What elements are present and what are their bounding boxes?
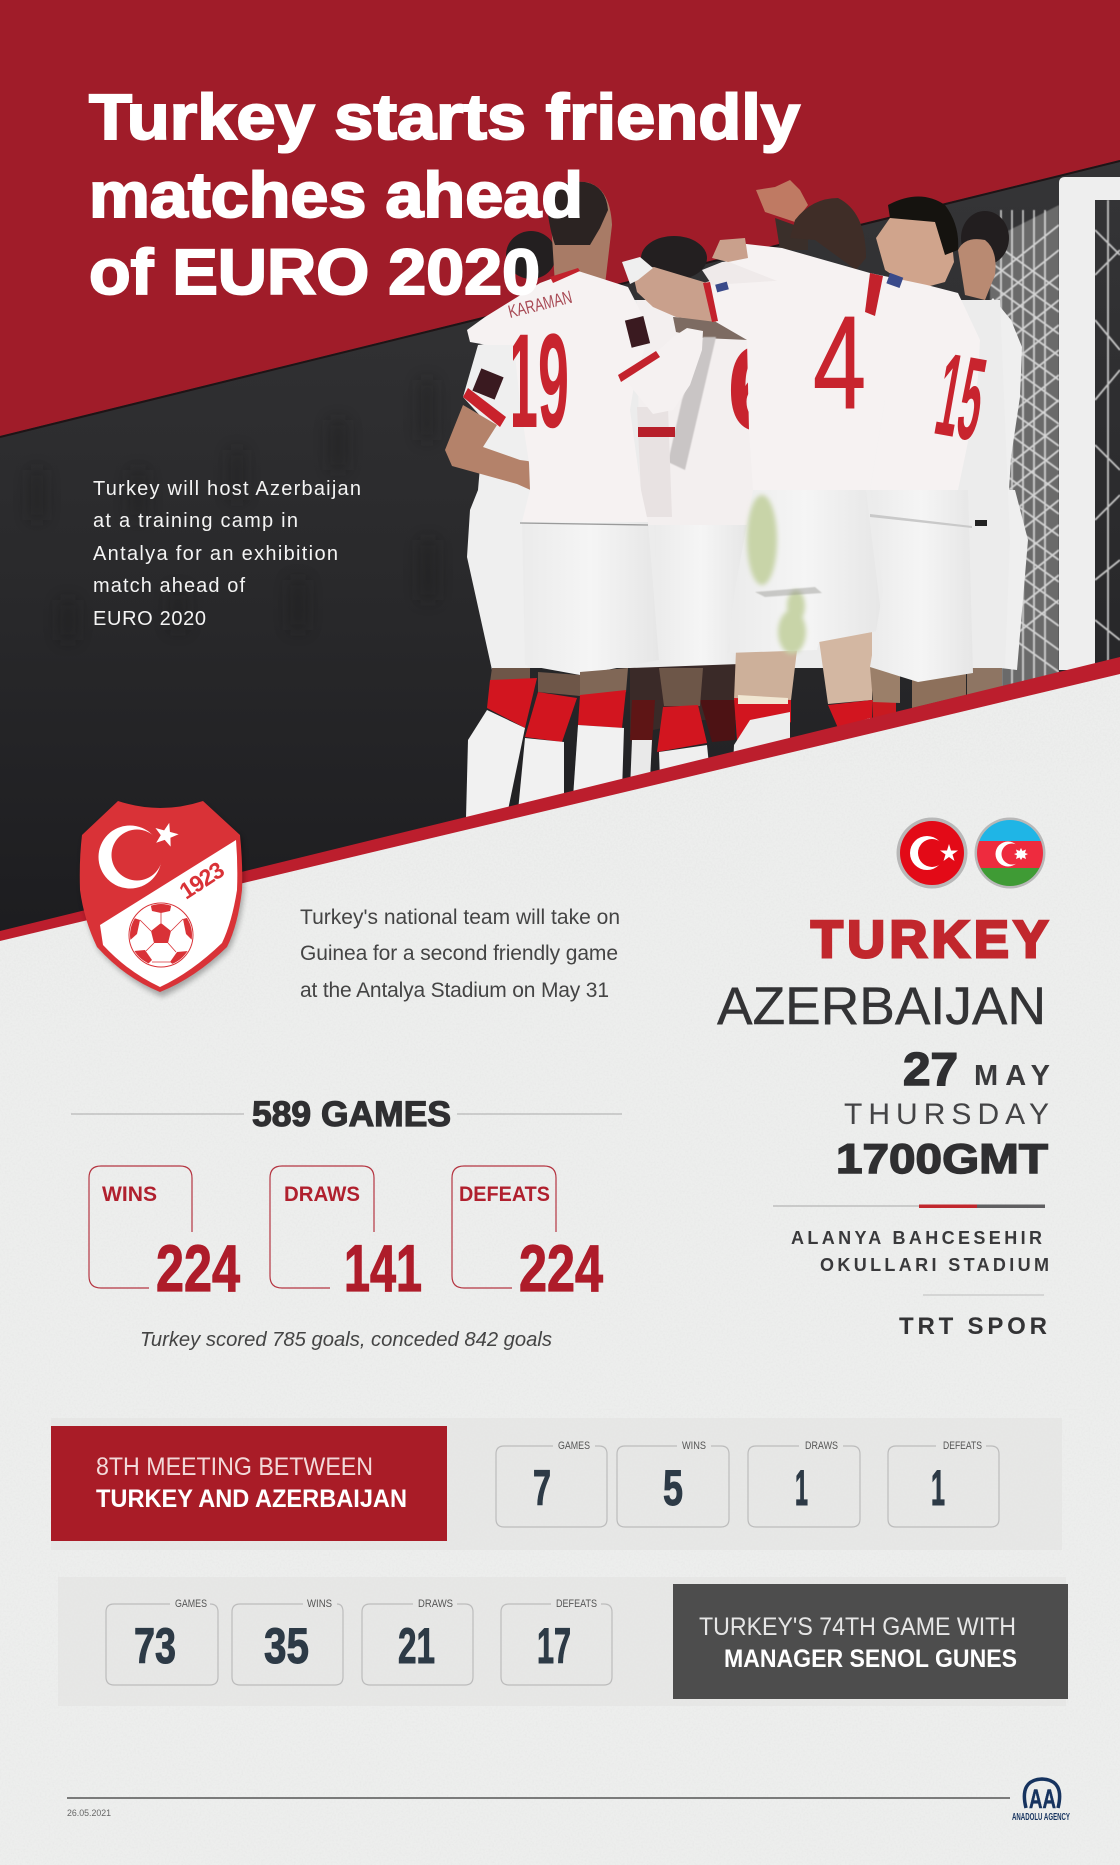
goal net bbox=[990, 205, 1059, 690]
footer rule and date: 26.05.2021 bbox=[67, 1808, 111, 1818]
title: matches ahead bbox=[89, 159, 583, 231]
match teams: AZERBAIJAN bbox=[717, 977, 1046, 1036]
card: defeats bbox=[501, 1598, 612, 1685]
venue: OKULLARI STADIUM bbox=[820, 1255, 1049, 1275]
title: of EURO 2020 bbox=[89, 236, 540, 308]
card: wins bbox=[617, 1440, 729, 1527]
stat box: draws: DRAWS bbox=[284, 1183, 360, 1206]
goals note: Turkey scored 785 goals, conceded 842 goals bbox=[140, 1329, 552, 1351]
card: draws bbox=[748, 1440, 860, 1527]
banner: TURKEY'S 74TH GAME WITH bbox=[699, 1613, 1016, 1641]
back centre player: 6 bbox=[727, 322, 787, 456]
title: Turkey starts friendly bbox=[89, 81, 800, 153]
heading: 589 games: 589 GAMES bbox=[252, 1095, 451, 1134]
player 19: 19 bbox=[507, 307, 569, 456]
head of player 19 bbox=[546, 182, 612, 285]
players photo cut-out: 15 bbox=[927, 329, 994, 466]
player 15 shorts and legs bbox=[870, 490, 987, 708]
card: games: 7 bbox=[533, 1460, 551, 1516]
card: draws bbox=[362, 1598, 473, 1685]
card: wins: WINS bbox=[682, 1440, 706, 1452]
back centre player bbox=[630, 300, 787, 790]
card: games bbox=[496, 1440, 607, 1527]
panel: 8th meeting bbox=[51, 1418, 1062, 1550]
card: wins: 35 bbox=[264, 1618, 309, 1674]
card: defeats: 1 bbox=[931, 1460, 945, 1516]
sleeve of player 19 bbox=[618, 328, 703, 414]
card: draws: 1 bbox=[795, 1460, 808, 1516]
icon: Anadolu Agency logo bbox=[1012, 1779, 1070, 1823]
player 15 torso and arm bbox=[712, 238, 994, 490]
text block: second friendly: Guinea for a second friendly game bbox=[300, 942, 618, 965]
text block: second friendly: at the Antalya Stadium on May 31 bbox=[300, 979, 609, 1002]
stat box: draws bbox=[270, 1166, 422, 1305]
stat box: wins: 224 bbox=[156, 1231, 240, 1305]
head raised hand bbox=[756, 180, 808, 250]
match date and time bbox=[836, 1043, 1050, 1182]
match date and time: 27 bbox=[903, 1043, 958, 1095]
icon: Anadolu Agency logo: ANADOLU AGENCY bbox=[1012, 1811, 1070, 1823]
card: draws: 21 bbox=[398, 1618, 435, 1674]
head of player 15 bbox=[876, 196, 958, 290]
paper grain texture bbox=[0, 674, 1120, 1865]
player 19 bbox=[467, 268, 659, 832]
card: wins: WINS bbox=[307, 1598, 332, 1610]
players photo cut-out bbox=[445, 180, 1028, 832]
left player bbox=[445, 231, 556, 818]
title bbox=[89, 81, 800, 308]
banner bbox=[51, 1426, 447, 1541]
venue: ALANYA BAHCESEHIR bbox=[791, 1228, 1042, 1248]
icon: Azerbaijan flag bbox=[974, 818, 1046, 888]
soccer ball bbox=[128, 902, 194, 968]
player 4 legs and shorts bbox=[727, 490, 896, 790]
stat box: wins: WINS bbox=[102, 1183, 157, 1206]
broadcaster: TRT SPOR bbox=[899, 1313, 1047, 1340]
card: wins bbox=[232, 1598, 343, 1685]
intro paragraph: Antalya for an exhibition bbox=[93, 543, 338, 565]
head of player 4 bbox=[790, 198, 866, 270]
intro paragraph: match ahead of bbox=[93, 575, 245, 597]
panel: manager record bbox=[58, 1577, 1068, 1706]
stat box: wins bbox=[89, 1166, 240, 1305]
icon: Turkish Football Federation crest: 1923 bbox=[175, 856, 229, 904]
card: games: GAMES bbox=[175, 1598, 207, 1610]
card: defeats bbox=[888, 1440, 999, 1527]
card: games: GAMES bbox=[558, 1440, 590, 1452]
card: defeats: DEFEATS bbox=[943, 1440, 982, 1452]
banner: MANAGER SENOL GUNES bbox=[724, 1645, 1017, 1673]
icon: Turkey flag bbox=[896, 818, 968, 888]
card: games bbox=[106, 1598, 218, 1685]
icon: Anadolu Agency logo: AA bbox=[1029, 1784, 1056, 1814]
stat box: defeats: 224 bbox=[519, 1231, 603, 1305]
match date and time: MAY bbox=[974, 1060, 1050, 1092]
match teams: TURKEY bbox=[811, 911, 1048, 969]
goal post bbox=[1059, 177, 1120, 670]
text block: second friendly: Turkey's national team will take on bbox=[300, 906, 620, 929]
card: draws: DRAWS bbox=[805, 1440, 838, 1452]
card: wins: 5 bbox=[663, 1460, 683, 1516]
back centre head bbox=[641, 236, 707, 280]
venue bbox=[791, 1228, 1049, 1275]
card: games: 73 bbox=[134, 1618, 176, 1674]
intro paragraph bbox=[93, 478, 361, 630]
card: defeats: 17 bbox=[537, 1618, 571, 1674]
divider bar bbox=[773, 1204, 1045, 1208]
player 4 torso bbox=[622, 256, 885, 490]
player 19: KARAMAN bbox=[506, 287, 574, 322]
stat box: draws: 141 bbox=[344, 1231, 422, 1305]
match date and time: 1700GMT bbox=[836, 1135, 1048, 1182]
card: draws: DRAWS bbox=[418, 1598, 453, 1610]
match teams bbox=[717, 911, 1048, 1036]
intro paragraph: Turkey will host Azerbaijan bbox=[93, 478, 361, 500]
icon: Turkish Football Federation crest bbox=[80, 801, 244, 997]
stat box: defeats bbox=[452, 1166, 603, 1305]
intro paragraph: EURO 2020 bbox=[93, 608, 206, 630]
far right player bbox=[958, 211, 1028, 705]
text block: second friendly bbox=[300, 906, 620, 1002]
banner: TURKEY AND AZERBAIJAN bbox=[96, 1485, 407, 1513]
red header polygon bbox=[0, 0, 1120, 437]
intro paragraph: at a training camp in bbox=[93, 510, 298, 532]
banner: 8TH MEETING BETWEEN bbox=[96, 1453, 373, 1481]
match date and time: THURSDAY bbox=[844, 1098, 1049, 1131]
lower paper diagonal with red band bbox=[0, 657, 1120, 1100]
player 4 torso: 4 bbox=[813, 289, 866, 436]
banner bbox=[673, 1584, 1068, 1699]
huddle body base bbox=[525, 300, 1010, 668]
stat box: defeats: DEFEATS bbox=[459, 1183, 550, 1206]
background photo: dark stadium bbox=[0, 150, 1120, 950]
card: defeats: DEFEATS bbox=[556, 1598, 597, 1610]
